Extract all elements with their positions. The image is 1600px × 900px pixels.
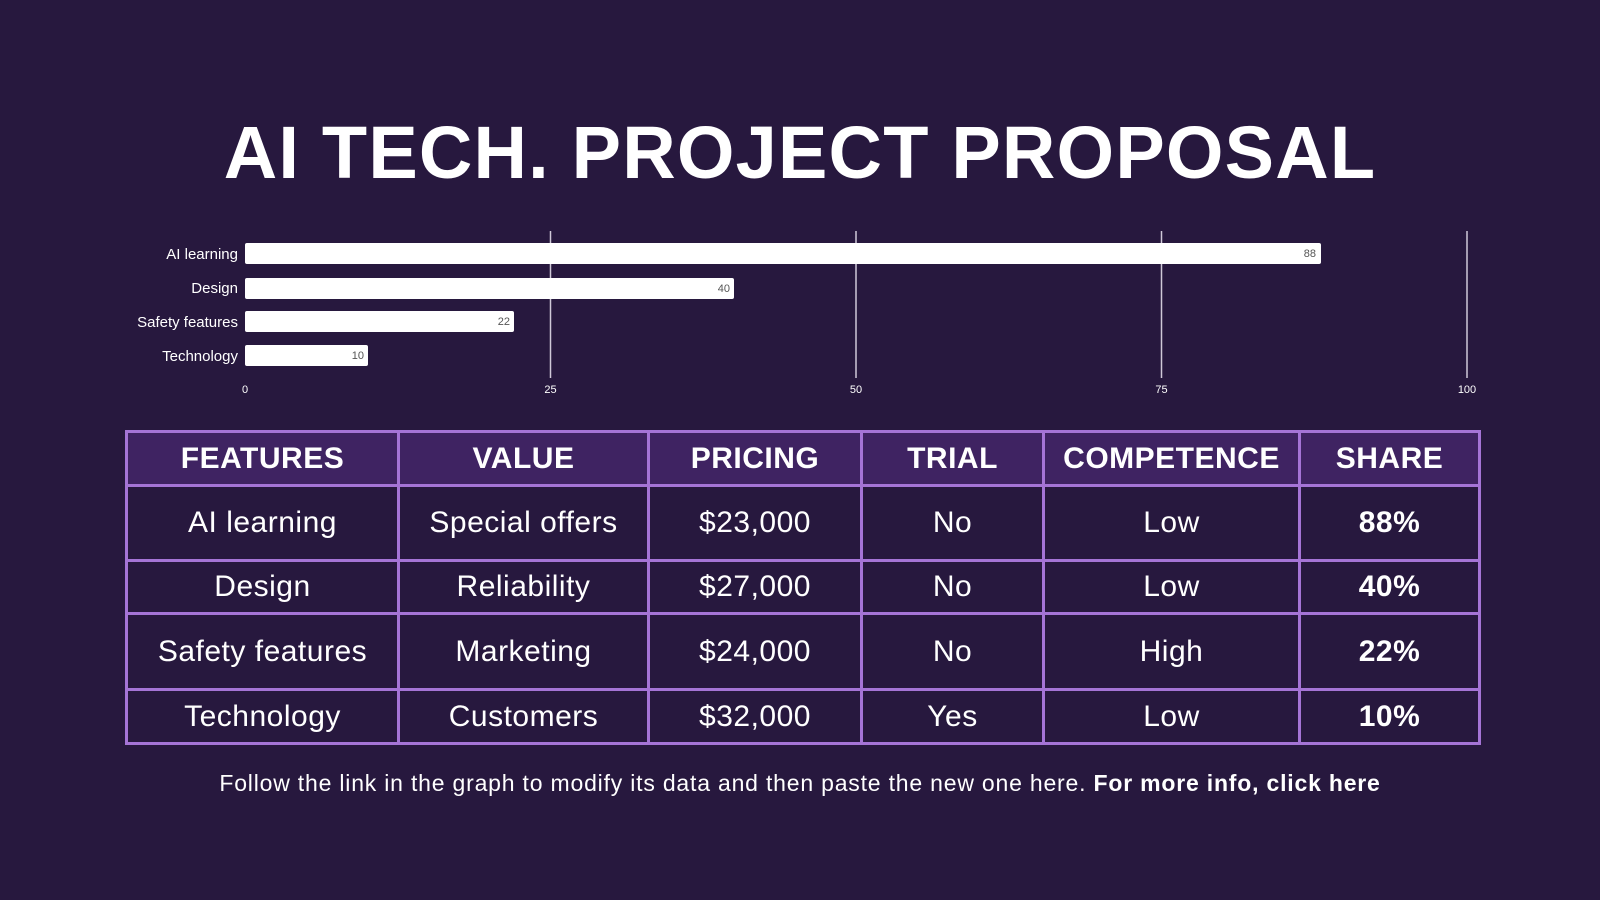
table: VALUE [473, 442, 574, 474]
bar chart: 88 [1304, 248, 1316, 260]
bar chart: Technology [162, 348, 238, 365]
table: High [1140, 634, 1203, 668]
table: No [933, 634, 972, 668]
table: $27,000 [699, 570, 811, 603]
bar chart: Design [191, 280, 238, 297]
table: Low [1143, 570, 1200, 603]
bar chart: AI learning [166, 246, 238, 263]
table: Safety features [158, 634, 367, 668]
table: Design [214, 570, 311, 603]
table: $24,000 [699, 634, 811, 668]
table [125, 430, 1481, 745]
table: $32,000 [699, 700, 811, 732]
table: Reliability [457, 570, 590, 603]
table: 22% [1359, 634, 1420, 668]
bar chart: 22 [498, 316, 510, 328]
bar chart: 0 [242, 384, 248, 396]
table: COMPETENCE [1063, 442, 1280, 474]
bar chart: Safety features [137, 314, 238, 331]
table: Low [1143, 700, 1200, 732]
table: Special offers [429, 506, 618, 539]
table: $23,000 [699, 506, 811, 539]
bar chart: 40 [718, 283, 730, 295]
bar chart [137, 231, 1476, 396]
bar chart: 25 [544, 384, 557, 396]
title: AI TECH. PROJECT PROPOSAL [224, 111, 1376, 194]
table: No [933, 570, 972, 603]
bar chart: 10 [352, 350, 364, 362]
table: Customers [449, 700, 598, 732]
table: Yes [927, 700, 978, 732]
table: No [933, 506, 972, 539]
table: PRICING [691, 442, 819, 474]
table: SHARE [1336, 442, 1443, 474]
table: AI learning [188, 506, 337, 539]
table: TRIAL [907, 442, 998, 474]
table: 10% [1359, 700, 1420, 732]
bar chart: 50 [850, 384, 862, 396]
table: FEATURES [181, 442, 344, 474]
footer note: Follow the link in the graph to modify its data and then paste the new one here. For more info, click here [219, 770, 1381, 796]
table: 40% [1359, 570, 1420, 603]
bar chart: 100 [1458, 384, 1476, 396]
table: Marketing [455, 634, 592, 668]
bar chart: 75 [1155, 384, 1168, 396]
table: 88% [1359, 506, 1420, 539]
table: Low [1143, 506, 1200, 539]
table: Technology [184, 700, 341, 732]
